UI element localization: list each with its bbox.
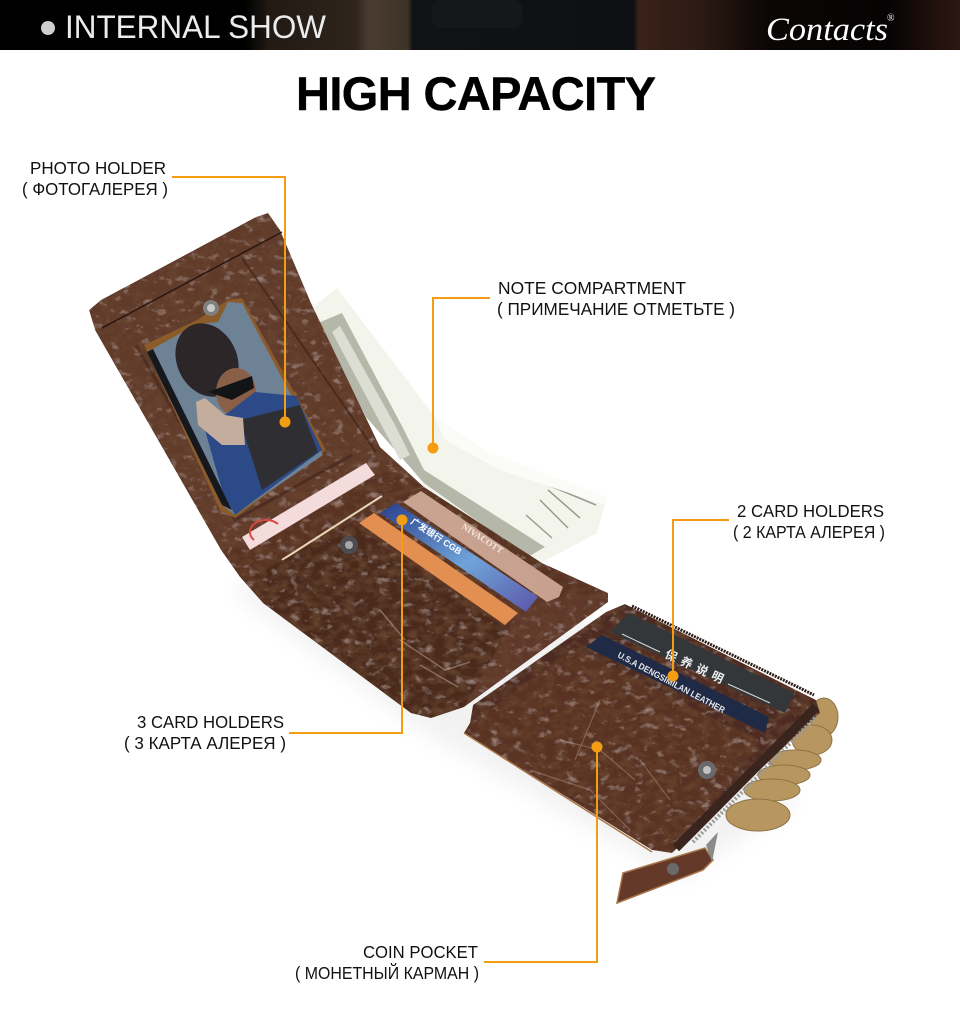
callout: 2 card holders [668, 501, 885, 682]
zipper pull [617, 832, 718, 903]
flap snap stud [698, 761, 716, 779]
header bullet [41, 21, 55, 35]
flap snap [203, 300, 219, 316]
callout: photo holder [22, 158, 290, 428]
wallet illustration: 广发银行 CGB [409, 515, 464, 557]
photo window [144, 298, 326, 518]
front pocket [252, 523, 508, 718]
peach card [403, 491, 563, 602]
callout: note compartment: ( ПРИМЕЧАНИЕ ОТМЕТЬТЕ ) [497, 299, 735, 319]
zipper [632, 606, 816, 848]
callout: coin pocket: ( МОНЕТНЫЙ КАРМАН ) [295, 962, 479, 983]
navy card: U.S.A DENGSIMILAN LEATHER [616, 650, 727, 715]
callout: coin pocket: COIN POCKET [363, 942, 478, 962]
pocket snap [340, 536, 358, 554]
callout: 2 card holders: 2 CARD HOLDERS [737, 501, 884, 521]
lower card panel [221, 487, 608, 718]
brand logo: ® [887, 13, 895, 24]
callout: note compartment: NOTE COMPARTMENT [498, 278, 686, 298]
callout: photo holder: ( ФОТОГАЛЕРЕЯ ) [22, 179, 168, 199]
orange card [359, 513, 518, 625]
dark card [610, 613, 794, 713]
dark card: 保养说明 [663, 646, 731, 688]
pink receipt [242, 463, 375, 550]
wallet illustration [89, 213, 838, 903]
banknotes [306, 288, 607, 563]
callout: photo holder: PHOTO HOLDER [30, 158, 166, 178]
coin pocket back [464, 604, 820, 853]
callout: 3 card holders [124, 514, 408, 753]
callout: 2 card holders: ( 2 КАРТА АЛЕРЕЯ ) [733, 522, 885, 542]
navy card [586, 635, 769, 733]
slot line [282, 496, 382, 560]
brand logo: Contacts [766, 12, 888, 48]
callout: 3 card holders: ( 3 КАРТА АЛЕРЕЯ ) [124, 733, 286, 753]
card print: NIVACOTT [460, 521, 505, 555]
right side of lower panel [464, 593, 608, 707]
header title: INTERNAL SHOW [65, 9, 327, 45]
top flap [89, 213, 424, 550]
callout: coin pocket [295, 742, 602, 983]
callout: 3 card holders: 3 CARD HOLDERS [137, 712, 284, 732]
blue card [380, 503, 538, 612]
coin pocket flap [464, 647, 761, 852]
coins [726, 698, 838, 831]
callout: note compartment [428, 278, 735, 454]
header band [0, 0, 960, 50]
title: HIGH CAPACITY [296, 67, 656, 120]
